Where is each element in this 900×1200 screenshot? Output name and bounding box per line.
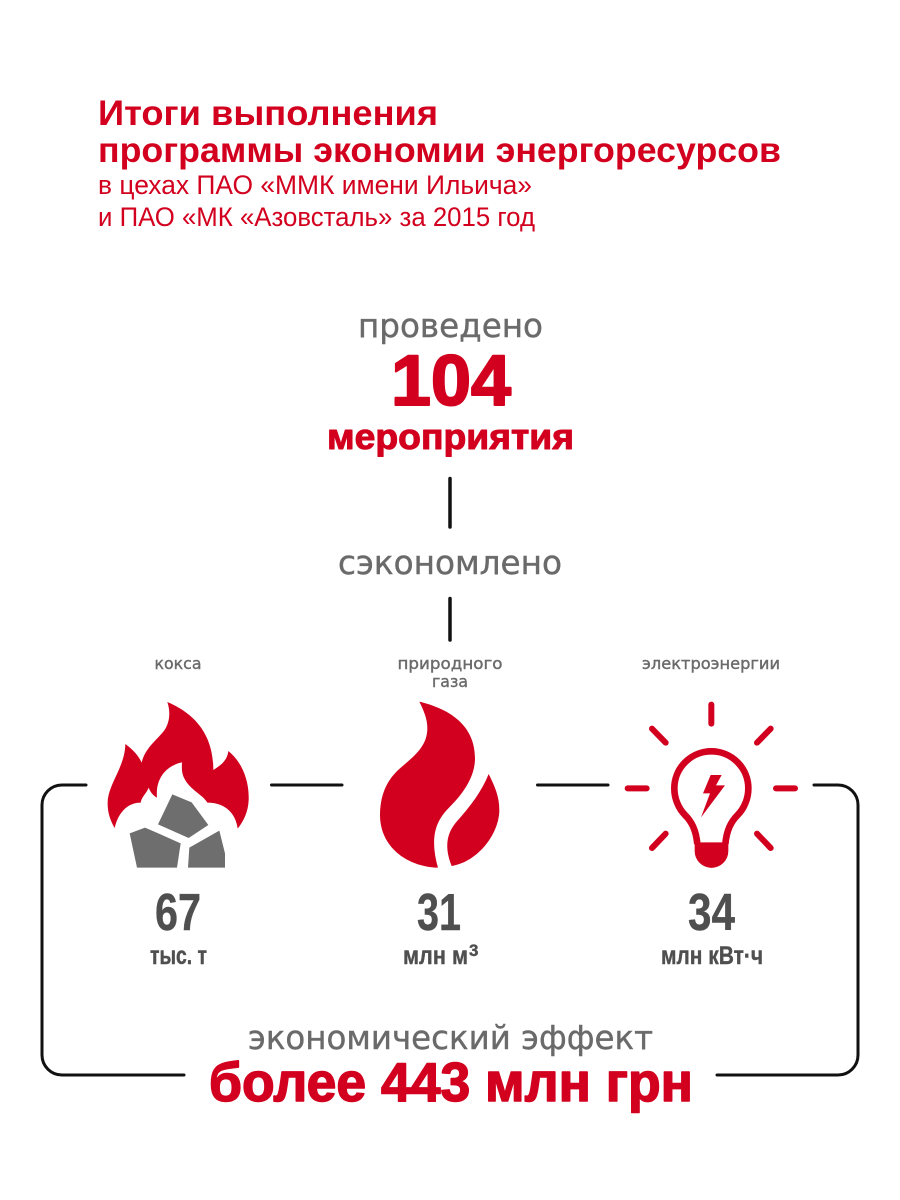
icon: gas flame — [380, 702, 499, 868]
connector: top — [448, 478, 452, 527]
number: 31: 31 — [417, 884, 461, 942]
column label: природного газа: природного — [398, 654, 502, 673]
column label: электроэнергии: электроэнергии — [642, 654, 780, 673]
connector: coke to gas — [272, 784, 342, 786]
title: Итоги выполнения — [98, 94, 438, 133]
number: 34: 34 — [688, 884, 735, 942]
number: 67: 67 — [155, 884, 201, 942]
unit: млн кВт·ч: млн кВт·ч — [661, 942, 763, 970]
column label: природного газа — [398, 654, 502, 691]
label: экономический эффект: экономический эффект — [248, 1018, 653, 1057]
label: мероприятия: мероприятия — [327, 416, 574, 457]
connector: bottom — [448, 598, 452, 640]
frame: right bracket — [717, 785, 858, 1075]
icon: light bulb — [628, 705, 795, 868]
subtitle: в цехах ПАО «ММК имени Ильича» — [98, 170, 532, 200]
icon: burning coke — [108, 702, 249, 868]
unit: тыс. т: тыс. т — [150, 942, 207, 970]
unit: млн м3: млн м — [403, 942, 468, 970]
label: проведено: проведено — [358, 306, 543, 345]
connector: gas to electricity — [538, 784, 608, 786]
title — [98, 94, 781, 170]
total: более 443 млн грн: более 443 млн грн — [209, 1051, 693, 1113]
title: программы экономии энергоресурсов — [98, 131, 781, 170]
column label: кокса: кокса — [154, 654, 202, 673]
subtitle: и ПАО «МК «Азовсталь» за 2015 год — [98, 202, 535, 232]
subtitle — [98, 170, 535, 232]
column label: природного газа: газа — [432, 672, 468, 691]
frame: left bracket — [42, 785, 184, 1075]
label: сэкономлено: сэкономлено — [338, 543, 562, 582]
number: 104: 104 — [391, 342, 512, 421]
unit: млн м3: 3 — [469, 941, 478, 960]
